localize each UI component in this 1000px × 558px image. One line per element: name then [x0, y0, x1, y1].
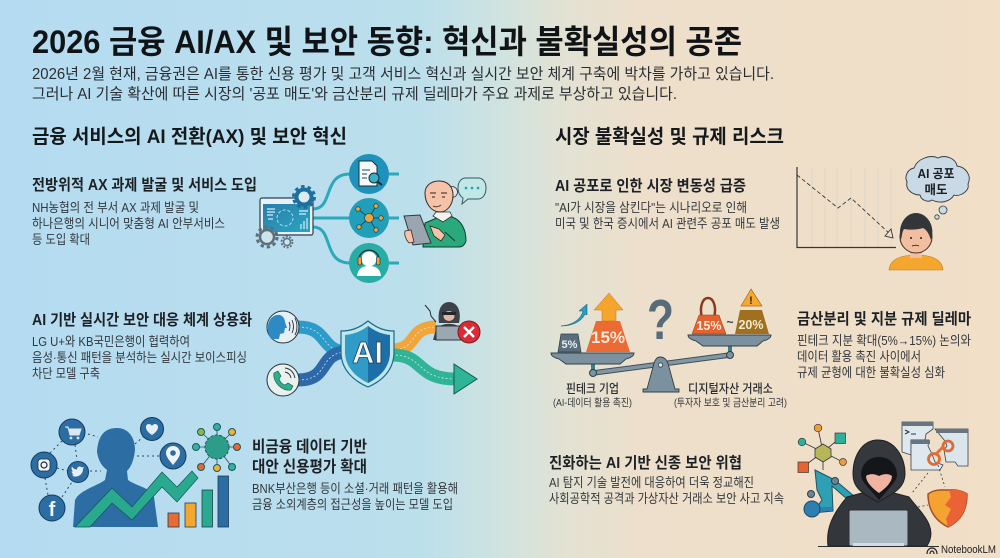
text block: alternative credit scoring: BNK부산은행 등이 소셜·거래 패턴을 활용해	[252, 481, 458, 496]
text block: market volatility: AI 공포로 인한 시장 변동성 급증	[555, 177, 746, 195]
text block: AX tasks: NH농협의 전 부서 AX 과제 발굴 및	[32, 200, 199, 215]
label: fintech: (AI-데이터 활용 촉진)	[553, 396, 632, 409]
intro text	[32, 65, 774, 103]
text block: AX tasks	[32, 176, 257, 247]
heading: left section: 금융 서비스의 AI 전환(AX) 및 보안 혁신	[32, 126, 347, 148]
icon: falling chart and worried person: 매도	[924, 182, 948, 197]
text block: evolving threats: AI 탐지 기술 발전에 대응하여 더욱 정교해진	[549, 475, 754, 490]
text block: real-time security	[32, 311, 252, 381]
label: digital asset exchange	[674, 382, 787, 409]
header	[32, 24, 774, 103]
intro text: 그러나 AI 기술 확산에 따른 시장의 '공포 매도'와 금산분리 규제 딜레마가 주요 과제로 부상하고 있습니다.	[32, 85, 677, 103]
text block: alternative credit scoring: 대안 신용평가 확대	[252, 458, 367, 476]
shield	[341, 321, 394, 387]
text block: alternative credit scoring	[252, 438, 458, 512]
icon: alternative data person	[31, 418, 240, 527]
text block: evolving threats	[549, 454, 784, 506]
text block: real-time security: 차단 모델 구축	[32, 366, 100, 381]
text block: evolving threats: 사회공학적 공격과 가상자산 거래소 보안 사고 지속	[549, 491, 784, 506]
icon: balance scale with stake weights	[551, 288, 771, 392]
intro text: 2026년 2월 현재, 금융권은 AI를 통한 신용 평가 및 고객 서비스 혁신과 실시간 보안 체계 구축에 박차를 가하고 있습니다.	[32, 65, 774, 83]
text block: market volatility	[555, 177, 780, 231]
text block: financial-industrial separation: 데이터 활용 촉진 사이에서	[797, 349, 921, 364]
icon: AI security shield flow	[267, 302, 480, 396]
icon: falling chart and worried person: AI 공포	[918, 167, 954, 181]
icon: balance scale with stake weights: !	[749, 295, 753, 307]
text block: AX tasks: 전방위적 AX 과제 발굴 및 서비스 도입	[32, 176, 257, 194]
icon: falling chart and worried person	[797, 157, 969, 270]
text block: financial-industrial separation: 핀테크 지분 확대(5%→15%) 논의와	[797, 333, 971, 348]
icon: balance scale with stake weights: 5%	[562, 339, 578, 351]
icon: AX workflow with senior	[257, 154, 486, 283]
label: fintech	[553, 382, 632, 409]
icon: alternative data person: f	[49, 499, 56, 521]
label: fintech: 핀테크 기업	[566, 382, 619, 396]
text block: market volatility: 미국 및 한국 증시에서 AI 관련주 공포 매도 발생	[555, 216, 780, 231]
text block: AX tasks: 등 도입 확대	[32, 232, 90, 247]
icon: balance scale with stake weights: 20%	[738, 318, 764, 332]
icon: balance scale with stake weights: ~	[726, 315, 734, 329]
text block: real-time security: LG U+와 KB국민은행이 협력하여	[32, 334, 190, 349]
title: 2026 금융 AI/AX 및 보안 동향: 혁신과 불확실성의 공존	[32, 24, 742, 60]
text block: alternative credit scoring: 금융 소외계층의 접근성을 높이는 모델 도입	[252, 497, 453, 512]
text block: real-time security: 음성·통신 패턴을 분석하는 실시간 보이스피싱	[32, 350, 247, 365]
label: digital asset exchange: (투자자 보호 및 금산분리 고려)	[674, 397, 787, 409]
text block: alternative credit scoring: 비금융 데이터 기반	[252, 438, 367, 456]
icon: balance scale with stake weights: 15%	[696, 319, 722, 333]
heading: right section: 시장 불확실성 및 규제 리스크	[555, 126, 784, 148]
shield: AI	[352, 335, 383, 370]
text block: financial-industrial separation	[797, 310, 971, 380]
label: digital asset exchange: 디지털자산 거래소	[688, 382, 773, 396]
text block: financial-industrial separation: 금산분리 및 지분 규제 딜레마	[797, 310, 971, 328]
text block: financial-industrial separation: 규제 균형에 대한 불확실성 심화	[797, 365, 945, 380]
text block: market volatility: "AI가 시장을 삼킨다"는 시나리오로 인해	[555, 200, 747, 215]
icon: balance scale with stake weights: ?	[647, 288, 674, 352]
text block: real-time security: AI 기반 실시간 보안 대응 체계 상용화	[32, 311, 252, 329]
text block: evolving threats: 진화하는 AI 기반 신종 보안 위협	[549, 454, 742, 472]
icon: balance scale with stake weights: 15%	[591, 328, 625, 347]
text block: AX tasks: 하나은행의 시니어 맞춤형 AI 안부서비스	[32, 216, 225, 231]
icon: hooded hacker with threats	[798, 422, 968, 546]
